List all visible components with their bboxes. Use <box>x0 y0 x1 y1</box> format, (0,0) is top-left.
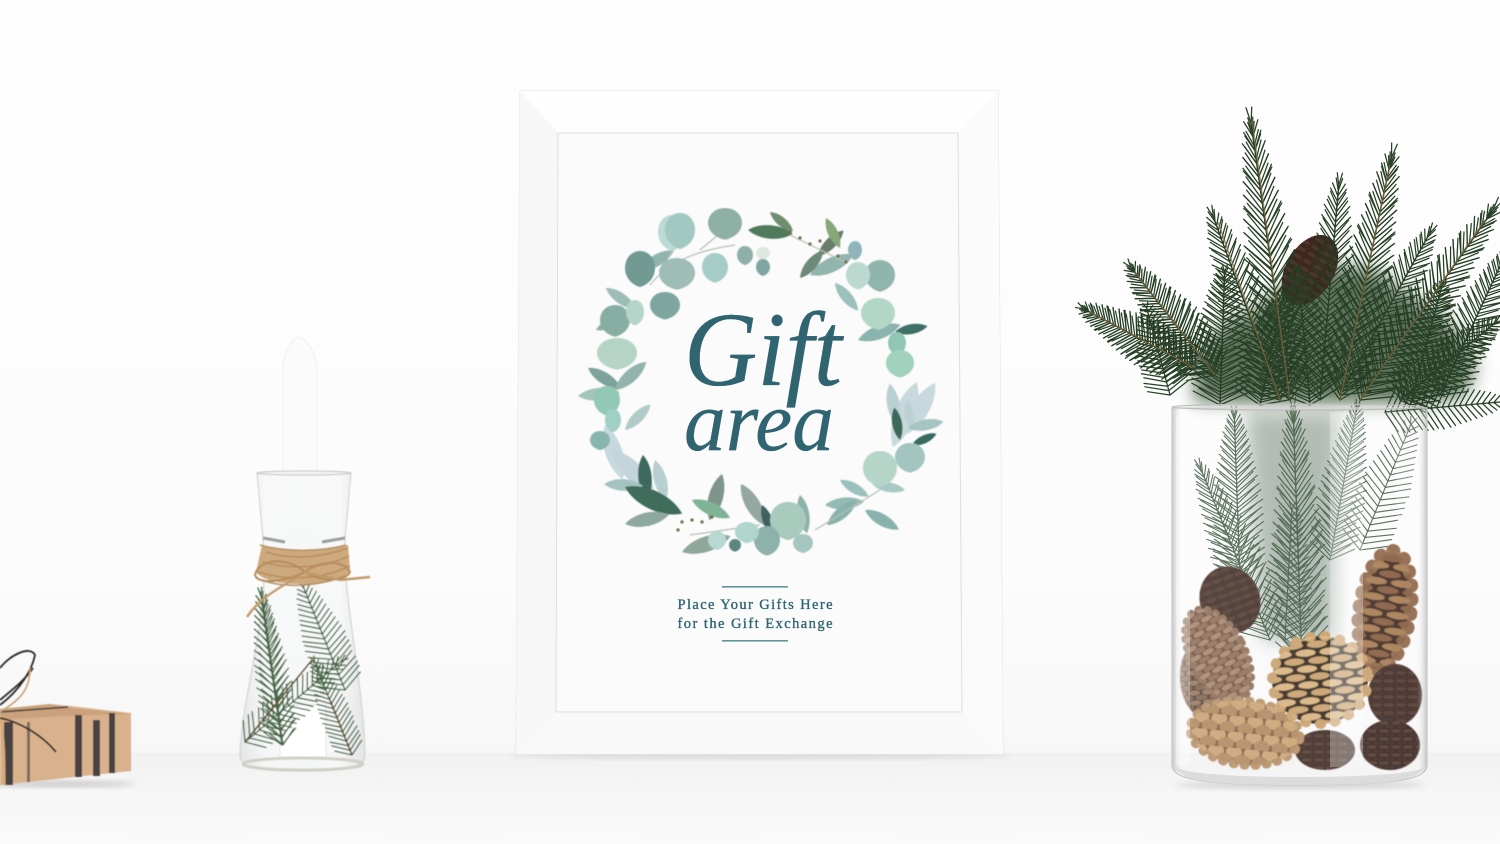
pine branches inside the jar <box>1173 396 1437 666</box>
picture frame <box>510 91 1010 759</box>
pine foliage above the jar <box>1065 104 1500 434</box>
caption text: Place Your Gifts Here <box>678 597 832 613</box>
glass jar with pine branches and pine cones <box>1065 104 1500 789</box>
top rule <box>722 586 788 588</box>
gift box <box>0 651 135 787</box>
candle <box>283 337 317 548</box>
pine cones <box>1171 547 1422 771</box>
caption text: for the Gift Exchange <box>678 616 832 632</box>
heading: area: area <box>684 373 834 469</box>
heading: Gift: Gift <box>684 291 844 408</box>
jar glass body <box>1172 404 1427 785</box>
wreath of eucalyptus leaves <box>577 208 944 559</box>
glass vase with twine and sprigs <box>233 471 370 771</box>
bottom rule <box>722 640 788 642</box>
shelf surface <box>0 753 1500 844</box>
caption text <box>678 597 832 632</box>
